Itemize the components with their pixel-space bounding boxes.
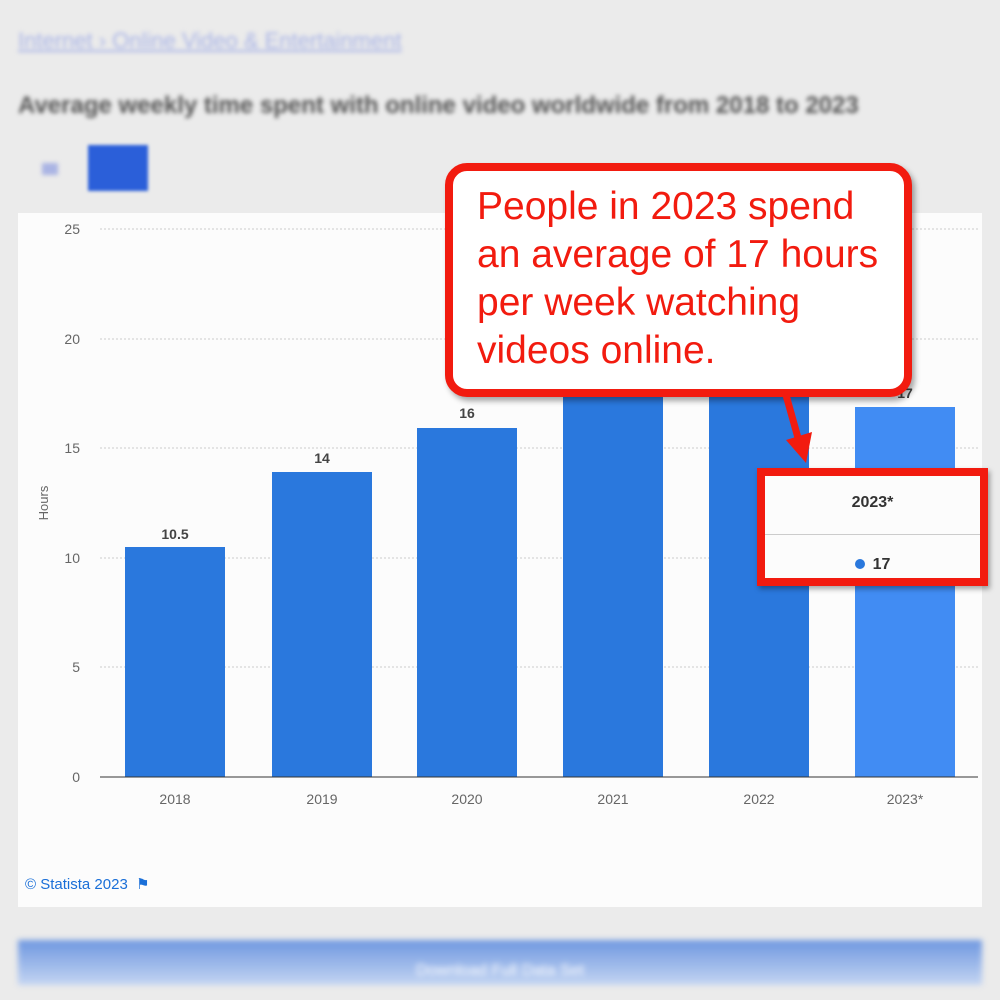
tooltip: 2023* (852, 494, 893, 511)
download button bar: Download Full Data Set (416, 962, 584, 979)
bar chart: 0 (72, 769, 80, 785)
bar chart: 2023* (887, 791, 924, 807)
bar chart: 2021 (597, 791, 629, 807)
bar chart: 17 (897, 385, 913, 401)
bar chart: 15 (64, 440, 80, 456)
chart panel (18, 213, 982, 907)
bar chart: 20 (64, 331, 80, 347)
bar chart: 10.5 (161, 526, 189, 542)
tooltip: 17 (873, 556, 890, 573)
bar chart: Hours (36, 485, 51, 520)
bar chart: 16 (459, 405, 475, 421)
bar chart: 5 (72, 659, 80, 675)
credit: © Statista 2023 ⚑ (25, 876, 150, 893)
bar chart: 14 (314, 450, 330, 466)
bar chart: 10 (64, 550, 80, 566)
toolbar buttons (40, 142, 150, 194)
title: Average weekly time spent with online video worldwide from 2018 to 2023 (18, 92, 859, 119)
tooltip (757, 468, 988, 586)
breadcrumb: Internet › Online Video & Entertainment (18, 28, 402, 53)
download button bar (18, 940, 982, 985)
callout (445, 163, 912, 397)
bar chart: 2018 (159, 791, 191, 807)
bar chart: 25 (64, 221, 80, 237)
callout: People in 2023 spend an average of 17 hours per week watching videos online. (477, 185, 878, 372)
bar chart: 2020 (451, 791, 483, 807)
bar chart: 2022 (743, 791, 775, 807)
bar chart: 2019 (306, 791, 338, 807)
